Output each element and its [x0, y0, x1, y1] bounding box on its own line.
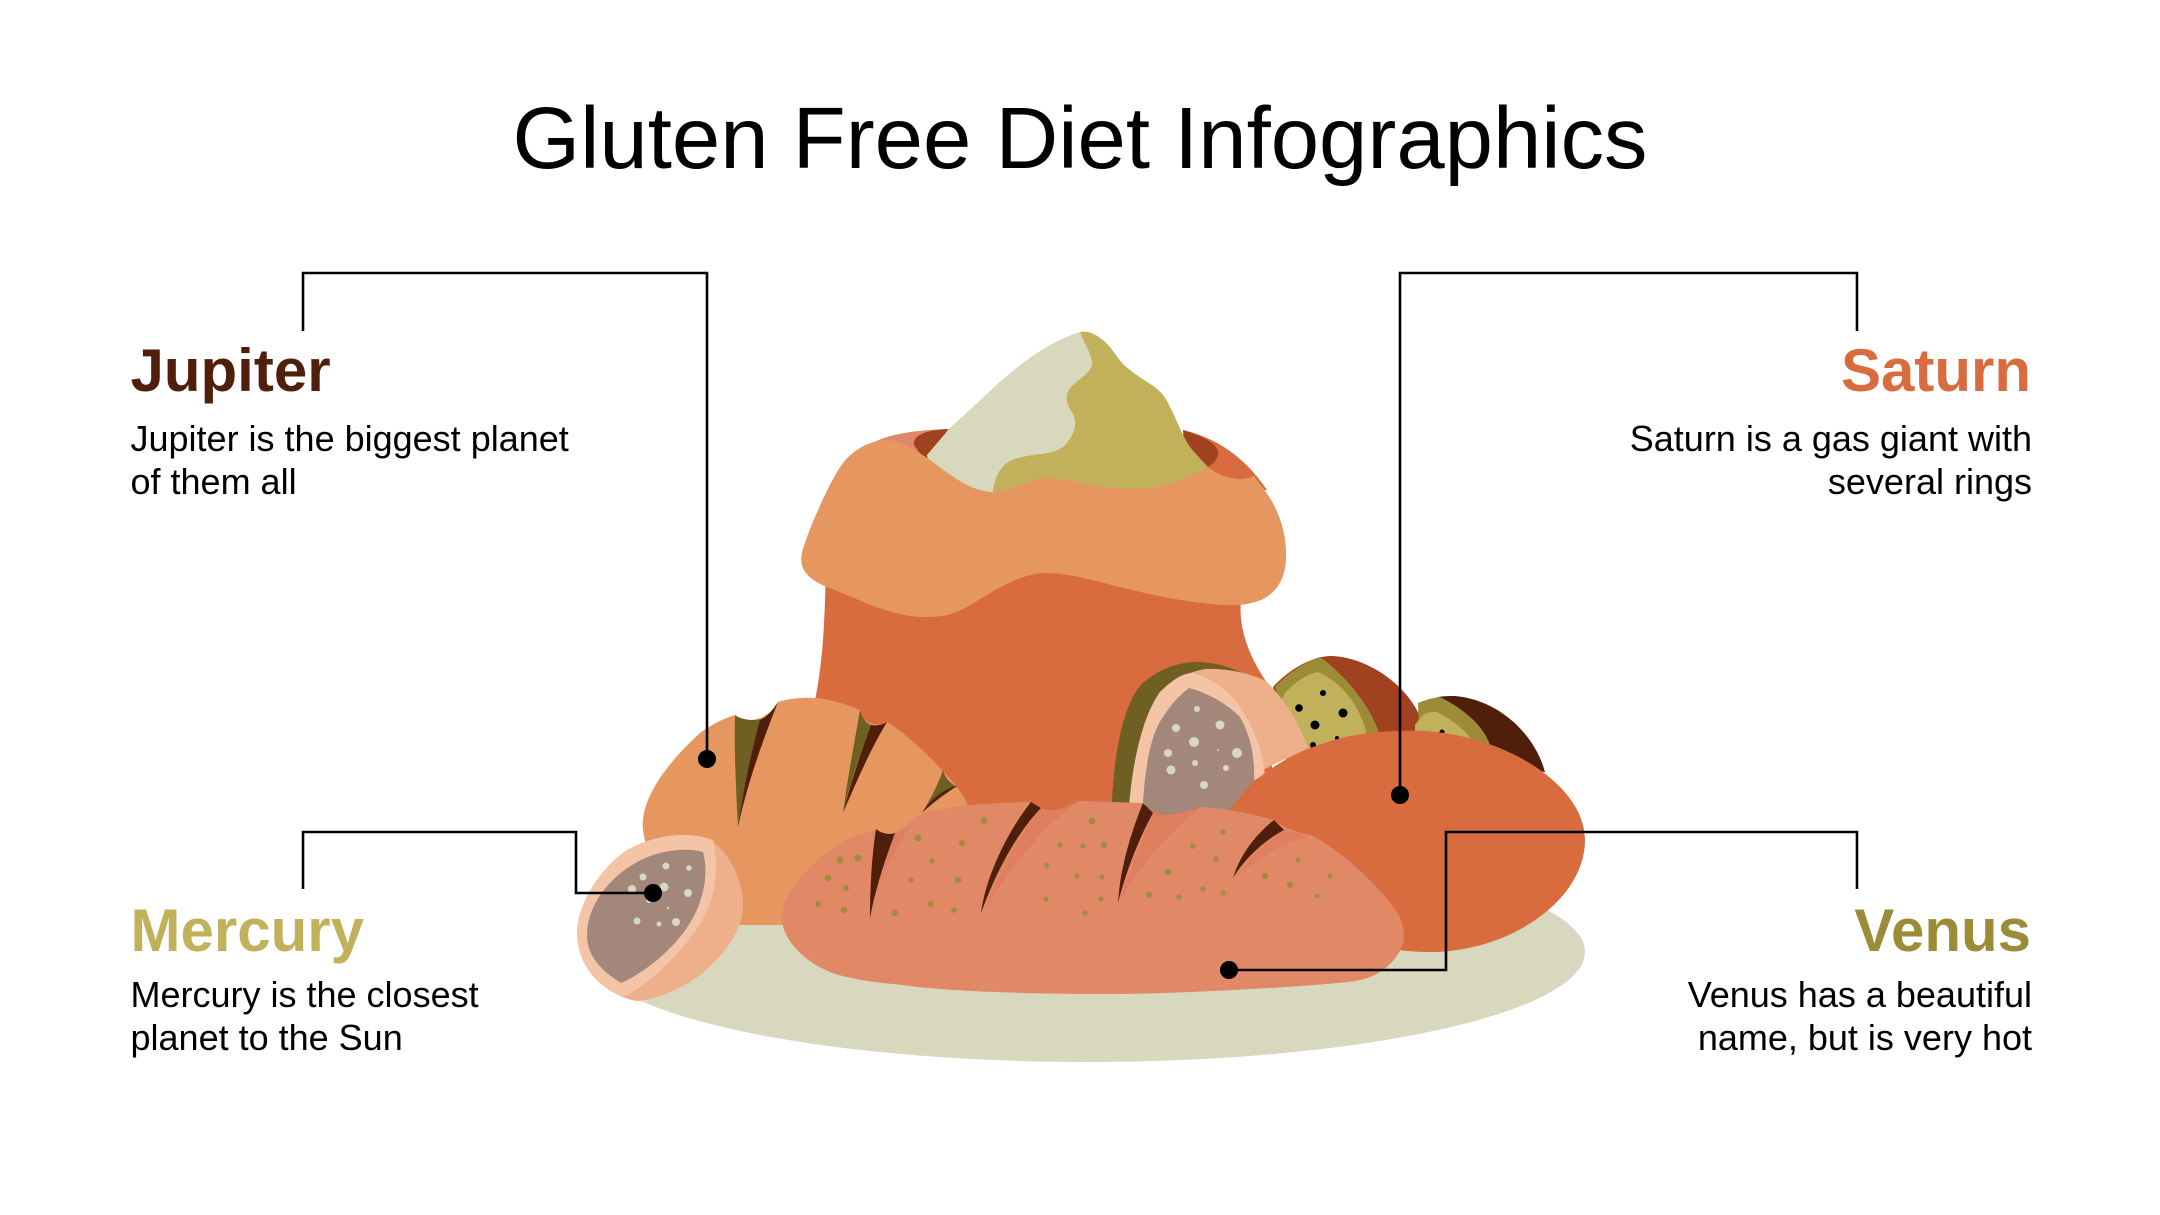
flour mound	[927, 332, 1208, 510]
sack flap	[801, 440, 1286, 617]
text block: Mercury: planet to the Sun	[130, 1017, 403, 1058]
front long loaf	[782, 801, 1404, 994]
sack body	[812, 530, 1272, 830]
text block: Mercury: Mercury is the closest	[130, 974, 479, 1015]
text block: Venus: name, but is very hot	[1698, 1017, 2032, 1058]
text block: Saturn: several rings	[1828, 461, 2032, 502]
illustration: bread and flour sack on plate	[577, 332, 1585, 1062]
text block: Mercury	[130, 897, 479, 1058]
left cut bread half	[577, 835, 743, 1001]
text block: Venus: Venus	[1854, 897, 2031, 964]
text block: Jupiter: of them all	[130, 461, 297, 502]
flour pale side	[927, 332, 1092, 500]
text block: Venus	[1688, 897, 2032, 1058]
text block: Jupiter: Jupiter	[130, 337, 331, 404]
callout connector: Mercury	[303, 832, 662, 902]
sack rim back right	[1183, 430, 1267, 490]
flour sack	[801, 332, 1286, 830]
callout connector: Venus	[1220, 832, 1857, 979]
centre cut bun	[1112, 662, 1308, 815]
sack inner dark right	[1183, 430, 1218, 467]
left scored loaf	[643, 698, 975, 925]
text block: Jupiter	[130, 337, 569, 502]
text block: Venus: Venus has a beautiful	[1688, 974, 2032, 1015]
title: Gluten Free Diet Infographics	[513, 90, 1647, 187]
back bun half with seeds	[1270, 656, 1427, 770]
text block: Mercury: Mercury	[130, 897, 365, 964]
plate	[589, 842, 1585, 1062]
text block: Saturn: Saturn is a gas giant with	[1630, 418, 2032, 459]
sack rim back left	[873, 429, 950, 470]
callout connector: Saturn	[1391, 273, 1857, 804]
round orange bun	[1228, 731, 1585, 952]
text block: Saturn: Saturn	[1841, 337, 2031, 404]
callout connector: Jupiter	[303, 273, 716, 768]
text block: Jupiter: Jupiter is the biggest planet	[130, 418, 569, 459]
far bun half	[1415, 696, 1545, 772]
text block: Saturn	[1630, 337, 2032, 502]
sack inner dark left	[914, 429, 948, 465]
